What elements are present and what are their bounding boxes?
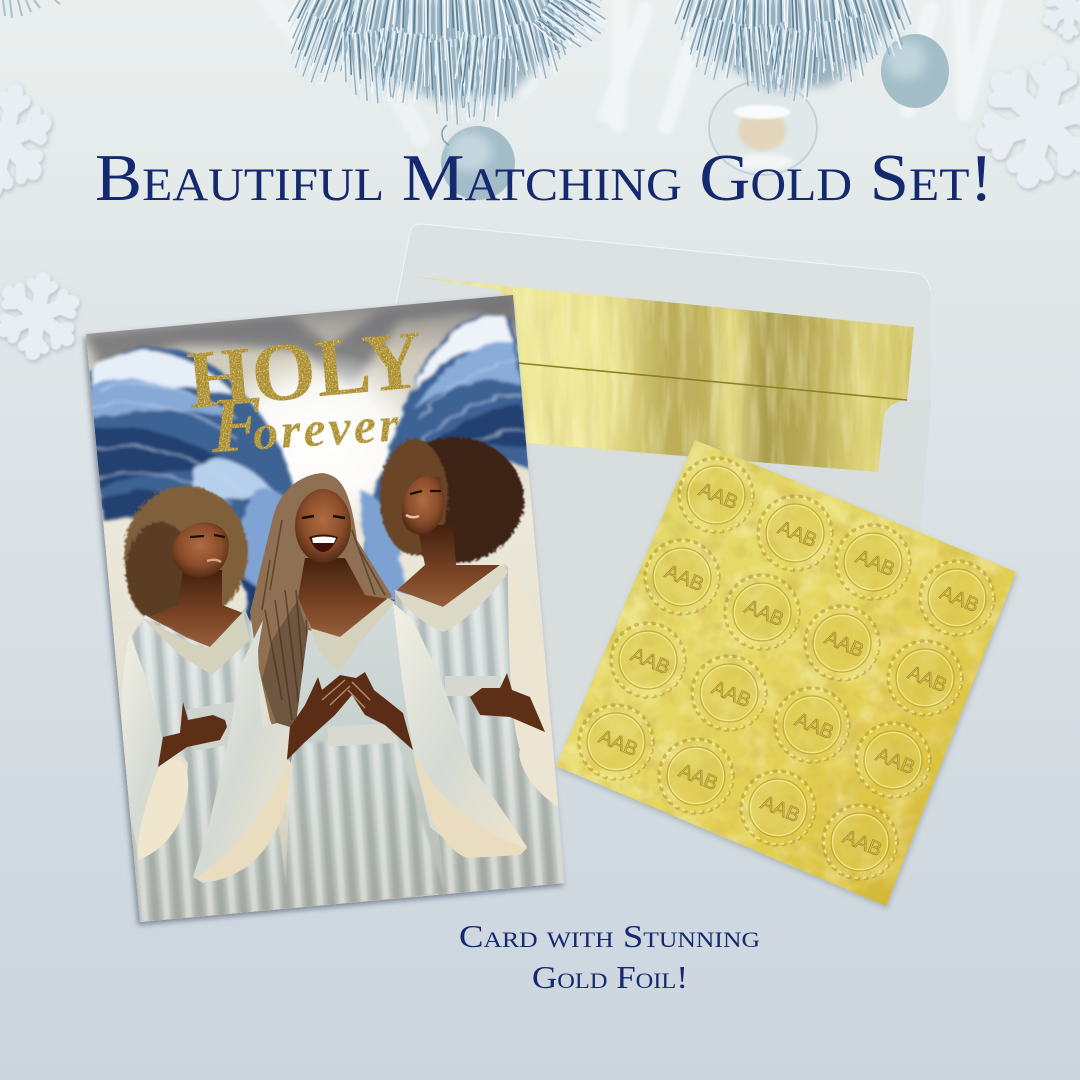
icon: glitter ornament centre [441,125,515,200]
left hair [124,486,248,622]
seal: row 4: AAB [758,792,803,827]
right neck [397,525,500,607]
right hand [470,673,545,732]
center neck [298,558,395,637]
decoration: silver tinsel left cluster [275,0,620,130]
seal: row 4 [579,705,897,879]
card title HOLY: HOLY [183,313,427,426]
right wing [362,313,528,558]
seal: row 2: AAB [742,596,787,631]
icon: snowflakes left [0,85,75,357]
icon: snowflake right [980,0,1080,189]
caption line two: Gold Foil! [532,960,688,995]
left sleeve inner [138,759,188,860]
seal: row 1 [679,458,994,635]
center face [295,489,351,563]
right sleeve [508,568,560,808]
center wing glow [240,486,410,624]
center right sleeve [393,603,527,857]
icon: clear glass ornament [709,81,817,175]
angel right [380,437,566,900]
seal: row 2: AAB [905,662,950,697]
seal: row 3: AAB [709,677,754,712]
seal: row 2: AAB [662,561,707,596]
center hair [250,473,392,764]
angel center [193,473,527,912]
card shadow [86,295,565,922]
icon: glitter ornament right [881,34,949,108]
seal: row 2: AAB [822,627,867,662]
right dress [394,564,566,900]
seal: row 4: AAB [840,826,885,861]
right face [402,476,444,535]
center left sleeve [193,620,293,883]
center right sleeve inner [413,748,527,858]
title: Beautiful Matching Gold Set! [95,141,993,215]
center left sleeve inner [195,760,290,882]
decoration: white fir branches [270,0,995,145]
card title Forever: Forever [207,370,403,469]
left sleeve [122,633,188,860]
seal: row 3 [611,623,930,797]
seal: row 4: AAB [676,760,721,795]
center hands [287,672,413,760]
gold seal sheet [556,440,1016,906]
angel left [122,486,290,925]
decoration: silver tinsel right cluster [665,0,921,106]
caption line one: Card with Stunning [459,919,760,954]
envelope [396,224,931,770]
right hair [380,437,524,563]
card sky [86,295,538,912]
left face [171,522,229,577]
seal: row 2 [645,540,962,715]
card caption [459,919,760,995]
center dress body [285,598,445,912]
decoration: top-left tinsel scrap [3,0,60,18]
seal: row 3: AAB [628,644,673,679]
left neck [142,570,243,647]
greeting card [80,290,570,930]
seal: row 3: AAB [873,744,918,779]
left dress [125,610,290,925]
gold foil envelope lining [417,277,914,472]
left wing [86,348,296,610]
seal: row 1: AAB [775,517,820,552]
seal: row 1: AAB [937,582,982,617]
left hand [158,702,227,767]
seal: row 3: AAB [792,709,837,744]
seal: row 1: AAB [853,546,898,581]
seal: row 1: AAB [696,479,741,514]
seal: row 4: AAB [596,726,641,761]
